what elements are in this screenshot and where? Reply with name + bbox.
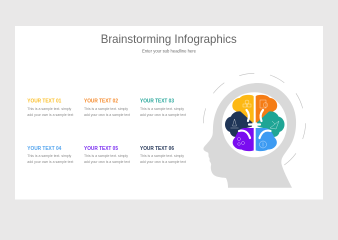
text block 06 (140, 146, 186, 164)
text block 05: This is a sample text. simply (84, 154, 128, 158)
text block 04: add your own is a sample text (27, 160, 73, 164)
dashed ring around head (203, 73, 306, 165)
icon: yellow lobe (243, 100, 251, 107)
text block 01: add your own is a sample text (27, 113, 73, 117)
text block 02: add your own is a sample text (84, 113, 130, 117)
panel: white card (15, 26, 323, 200)
lobe: purple (233, 128, 254, 151)
text block 01: YOUR TEXT 01 (27, 99, 61, 105)
text block 06: add your own is a sample text (140, 160, 186, 164)
lobe: orange (256, 95, 277, 122)
text block 04: This is a sample text. simply (27, 154, 71, 158)
title: Brainstorming Infographics (101, 32, 237, 46)
white brain circle (222, 92, 287, 157)
text block 01 (27, 99, 73, 117)
icon: plane on teal lobe (270, 121, 279, 129)
lobe: yellow (232, 95, 254, 122)
text block 03: This is a sample text. simply (140, 107, 184, 111)
icon: purple lobe (238, 138, 244, 145)
text block 05: add your own is a sample text (84, 160, 130, 164)
lobe: navy (225, 111, 252, 137)
text block 01: This is a sample text. simply (27, 107, 71, 111)
text block 04 (27, 146, 73, 164)
icon: blue lobe (260, 141, 266, 148)
text block 03: add your own is a sample text (140, 113, 186, 117)
subtitle: Enter your sub headline here (142, 48, 196, 54)
text block 05: YOUR TEXT 05 (84, 146, 118, 152)
text block 05 (84, 146, 130, 164)
text block 02 (84, 99, 130, 117)
icon: rocket on navy lobe (230, 119, 238, 128)
text block 03: YOUR TEXT 03 (140, 99, 174, 105)
text block 06: YOUR TEXT 06 (140, 146, 174, 152)
icon: orange lobe (260, 100, 268, 108)
text block 02: YOUR TEXT 02 (84, 99, 118, 105)
head silhouette (203, 83, 296, 188)
lobe: blue (256, 128, 277, 151)
text block 03 (140, 99, 186, 117)
white connector curves (239, 110, 270, 138)
lobe: teal (257, 111, 284, 137)
text block 02: This is a sample text. simply (84, 107, 128, 111)
text block 04: YOUR TEXT 04 (27, 146, 61, 152)
brain (225, 95, 284, 151)
text block 06: This is a sample text. simply (140, 154, 184, 158)
